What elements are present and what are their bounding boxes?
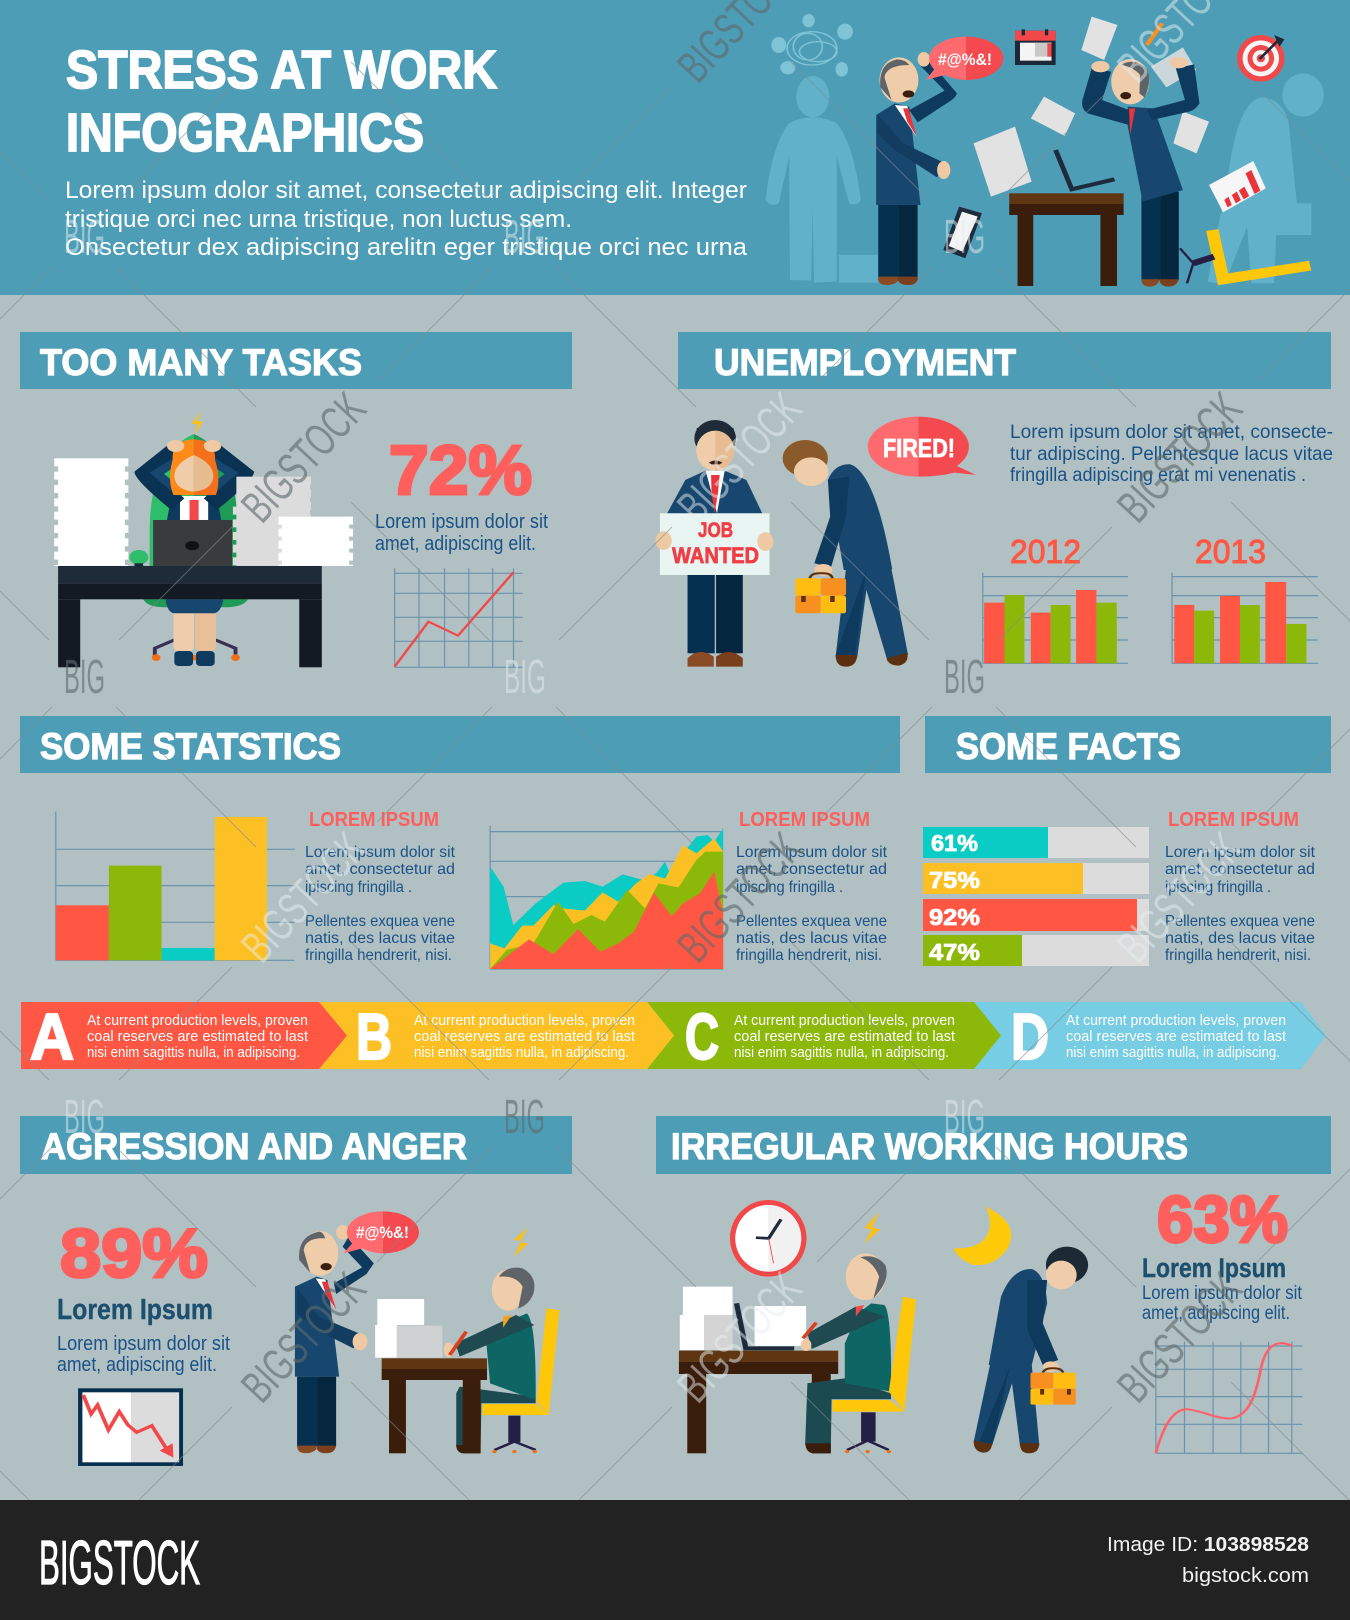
arrow strip A B C D — [21, 1000, 1326, 1073]
job wanted sign — [655, 513, 774, 575]
statistic 63%: 63% — [1157, 1182, 1288, 1256]
statistic 63%: amet, adipiscing elit. — [1142, 1303, 1290, 1324]
text block: facts — [1165, 809, 1316, 964]
fired man — [783, 440, 908, 667]
tired man — [974, 1247, 1088, 1453]
section banner: unemployment — [678, 332, 1331, 389]
section banner: some facts: SOME FACTS — [956, 726, 1181, 767]
text block: statistics 2: natis, des lacus vitae — [736, 930, 887, 947]
arrow A: coal reserves are estimated to last — [87, 1028, 309, 1045]
desk plant — [129, 550, 148, 567]
illustration: job wanted man and fired man — [655, 417, 976, 667]
arrow B: nisi enim sagittis nulla, in adipiscing. — [414, 1044, 629, 1061]
text block: facts: Pellentes exquea vene — [1165, 913, 1315, 930]
progress bars: 75% — [929, 867, 980, 893]
text block: facts: amet, consectetur ad — [1165, 861, 1315, 878]
arrow D: coal reserves are estimated to last — [1066, 1028, 1287, 1045]
arrow B — [319, 1000, 674, 1073]
section banner: unemployment: UNEMPLOYMENT — [714, 342, 1016, 383]
text block: facts: ipiscing fringilla . — [1165, 879, 1271, 896]
illustration: clock, night worker and tired man — [679, 1200, 1088, 1453]
ghost figure left — [765, 76, 878, 283]
watermarks: BIG — [504, 211, 545, 264]
arrow B: At current production levels, proven — [414, 1012, 635, 1029]
area chart — [490, 826, 723, 969]
illustration: angry boss and worker: #@%&! — [356, 1223, 409, 1242]
header band — [0, 0, 1350, 295]
header illustration: arguing managers — [765, 15, 1324, 287]
watermarks: BIG — [64, 651, 105, 704]
header intro text: Lorem ipsum dolor sit amet, consectetur adipiscing elit. Integer — [65, 177, 747, 204]
unemployment text — [1010, 422, 1333, 486]
statistic 89% — [57, 1215, 230, 1376]
statistic 72%: 72% — [389, 431, 532, 509]
statistic 63%: Lorem Ipsum — [1142, 1253, 1286, 1283]
watermarks: BIGSTOCK — [1108, 823, 1252, 972]
watermarks: BIGSTOCK — [1108, 383, 1252, 532]
header intro text — [65, 177, 748, 261]
section banner: irregular working hours — [656, 1116, 1331, 1174]
footer logo: BIGSTOCK — [39, 1529, 200, 1598]
progress bars: 61% — [931, 830, 978, 856]
site url: bigstock.com — [1182, 1565, 1309, 1587]
arrow D: nisi enim sagittis nulla, in adipiscing. — [1066, 1044, 1280, 1061]
bar chart 2013 — [1172, 533, 1318, 663]
watermarks: BIG — [944, 1091, 985, 1144]
lightning — [514, 1227, 528, 1257]
paper stacks — [375, 1299, 442, 1358]
job seeker — [667, 420, 762, 667]
arrow A: A — [30, 1000, 74, 1073]
bar chart 2012: 2012 — [1010, 533, 1081, 570]
yellow chair — [482, 1308, 559, 1453]
text block: statistics 1: Lorem ipsum dolor sit — [305, 844, 456, 861]
pencil icon — [1147, 23, 1162, 45]
watermarks: BIG — [944, 651, 985, 704]
grey paper stack — [235, 477, 310, 566]
text block: statistics 2 — [736, 809, 888, 964]
description — [375, 511, 548, 555]
illustration: angry boss and worker — [295, 1211, 559, 1453]
watermarks: BIG — [64, 211, 105, 264]
statistic 89%: Lorem Ipsum — [57, 1294, 213, 1326]
text block: facts: natis, des lacus vitae — [1165, 930, 1315, 947]
text block: facts: LOREM IPSUM — [1168, 809, 1299, 831]
image id: Image ID: 103898528 — [1107, 1534, 1309, 1556]
illustration: job wanted man and fired man: WANTED — [672, 543, 759, 568]
description: Lorem ipsum dolor sit — [375, 511, 548, 533]
title: STRESS AT WORK — [66, 40, 497, 100]
header illustration: arguing managers: #@%&! — [938, 50, 992, 69]
table — [382, 1358, 487, 1453]
watermarks: BIGSTOCK — [232, 823, 376, 972]
progress bars: 47% — [929, 939, 980, 965]
clock icon — [730, 1200, 807, 1277]
seated worker — [444, 1268, 536, 1453]
stress scribble above ghost — [772, 15, 852, 76]
arrow A — [21, 1000, 347, 1073]
section banner: too many tasks — [20, 332, 572, 389]
speech bubble — [926, 37, 1003, 80]
office chair — [143, 434, 248, 607]
statistic 72% — [375, 431, 548, 555]
arrow D: D — [1011, 1000, 1049, 1073]
illustration: job wanted man and fired man: JOB — [698, 519, 733, 542]
unemployment text: tur adipiscing. Pellentesque lacus vitae — [1010, 444, 1333, 465]
text block: statistics 1: fringilla hendrerit, nisi. — [305, 947, 452, 964]
calendar icon — [1015, 29, 1056, 65]
speech bubble — [343, 1211, 419, 1253]
watermarks: BIG — [64, 1091, 105, 1144]
arrow D: At current production levels, proven — [1066, 1012, 1286, 1029]
footer bar — [0, 1500, 1350, 1620]
watermarks: BIGSTOCK — [668, 823, 812, 972]
watermarks: BIG — [504, 651, 546, 704]
bar chart 2012 — [983, 533, 1128, 663]
watermarks: BIG — [504, 1091, 545, 1144]
paper stack — [680, 1287, 733, 1350]
angry boss — [295, 1225, 374, 1453]
text block: facts: Lorem ipsum dolor sit — [1165, 844, 1316, 861]
statistic 89%: 89% — [60, 1215, 208, 1292]
text block: statistics 1: ipiscing fringilla . — [305, 879, 412, 896]
right man shouting — [1082, 57, 1199, 287]
left paper stack — [57, 458, 126, 566]
hair and face — [167, 439, 221, 495]
night worker — [801, 1253, 891, 1453]
lightning — [864, 1212, 880, 1244]
arrow C: At current production levels, proven — [734, 1012, 955, 1029]
arrow B: B — [356, 1000, 392, 1073]
arrow B: coal reserves are estimated to last — [414, 1028, 636, 1045]
phone icon — [943, 207, 982, 258]
unemployment text: Lorem ipsum dolor sit amet, consecte- — [1010, 422, 1333, 443]
bar chart: statistics — [56, 812, 295, 960]
text block: statistics 1: Pellentes exquea vene — [305, 913, 455, 930]
left man shouting — [876, 52, 957, 285]
arrow A: nisi enim sagittis nulla, in adipiscing. — [87, 1044, 300, 1061]
unemployment text: fringilla adipiscing erat mi venenatis . — [1010, 465, 1306, 486]
text block: statistics 1: amet, consectetur ad — [305, 861, 455, 878]
flying papers — [974, 17, 1209, 197]
arrow D — [973, 1000, 1326, 1073]
text block: statistics 2: Pellentes exquea vene — [736, 913, 887, 930]
overturned chair — [1180, 230, 1310, 283]
watermarks — [64, 0, 1252, 1412]
statistic 63%: Lorem ipsum dolor sit — [1142, 1283, 1303, 1304]
table — [1009, 193, 1124, 286]
section banner: too many tasks: TOO MANY TASKS — [40, 342, 362, 383]
text block: statistics 1 — [305, 809, 456, 964]
section banner: aggression and anger: AGRESSION AND ANGER — [41, 1126, 467, 1167]
statistic 89%: Lorem ipsum dolor sit — [57, 1333, 230, 1355]
watermarks: BIGSTOCK — [1108, 1263, 1252, 1412]
text block: statistics 2: LOREM IPSUM — [739, 809, 870, 831]
watermarks: BIGSTOCK — [668, 1263, 812, 1412]
front paper stack — [281, 517, 350, 566]
fired speech bubble — [868, 417, 976, 477]
illustration: overwhelmed woman at desk — [57, 411, 350, 667]
description: amet, adipiscing elit. — [375, 533, 536, 555]
falling chart icon — [78, 1388, 183, 1466]
section banner: some statistics — [20, 716, 900, 773]
text block: statistics 1: natis, des lacus vitae — [305, 930, 455, 947]
text block: statistics 2: amet, consectetur ad — [736, 861, 887, 878]
arrow C: C — [685, 1000, 719, 1073]
text block: statistics 2: ipiscing fringilla . — [736, 879, 843, 896]
laptop and sheet — [737, 1303, 806, 1348]
thrown laptop — [1056, 150, 1114, 189]
arrow C — [647, 1000, 1001, 1073]
section banner: some statistics: SOME STATSTICS — [40, 726, 341, 767]
lightning — [192, 411, 203, 435]
moon icon — [953, 1207, 1011, 1265]
ghost figure right — [1208, 73, 1324, 285]
desk — [679, 1351, 838, 1453]
target icon — [1237, 35, 1284, 82]
chair base — [155, 640, 235, 657]
title: INFOGRAPHICS — [66, 103, 424, 163]
bar chart 2013: 2013 — [1195, 533, 1266, 570]
legs — [166, 599, 223, 666]
text block: statistics 1: LOREM IPSUM — [309, 809, 439, 831]
section banner: irregular working hours: IRREGULAR WORKING HOURS — [671, 1126, 1188, 1167]
desk — [58, 566, 322, 667]
arrow A: At current production levels, proven — [87, 1012, 308, 1029]
briefcase — [795, 573, 846, 613]
illustration: job wanted man and fired man: FIRED! — [883, 433, 955, 463]
yellow chair — [832, 1297, 916, 1453]
briefcase — [1030, 1368, 1076, 1405]
text block: statistics 2: Lorem ipsum dolor sit — [736, 844, 888, 861]
arrow C: nisi enim sagittis nulla, in adipiscing. — [734, 1044, 949, 1061]
statistic 89%: amet, adipiscing elit. — [57, 1354, 217, 1376]
section banner: aggression and anger — [20, 1116, 572, 1174]
torso and arms — [134, 441, 254, 520]
header intro text: tristique orci nec urna tristique, non luctus sem. — [65, 206, 572, 233]
arrow C: coal reserves are estimated to last — [734, 1028, 956, 1045]
progress bars — [923, 827, 1149, 966]
watermarks: BIGSTOCK — [232, 1263, 376, 1412]
laptop — [153, 520, 232, 566]
section banner: some facts — [925, 716, 1331, 773]
watermarks: BIGSTOCK — [232, 383, 376, 532]
curve chart — [1156, 1342, 1302, 1453]
header intro text: Onsectetur dex adipiscing arelitn eger tristique orci nec urna — [65, 234, 748, 261]
paper with bar chart — [1209, 161, 1266, 212]
watermarks: BIGSTOCK — [668, 383, 812, 532]
line chart: rising — [395, 568, 523, 667]
statistic 63% — [1142, 1182, 1303, 1324]
text block: statistics 2: fringilla hendrerit, nisi. — [736, 947, 882, 964]
text block: facts: fringilla hendrerit, nisi. — [1165, 947, 1311, 964]
title — [66, 40, 497, 163]
watermarks: BIG — [944, 211, 985, 264]
progress bars: 92% — [929, 904, 980, 930]
